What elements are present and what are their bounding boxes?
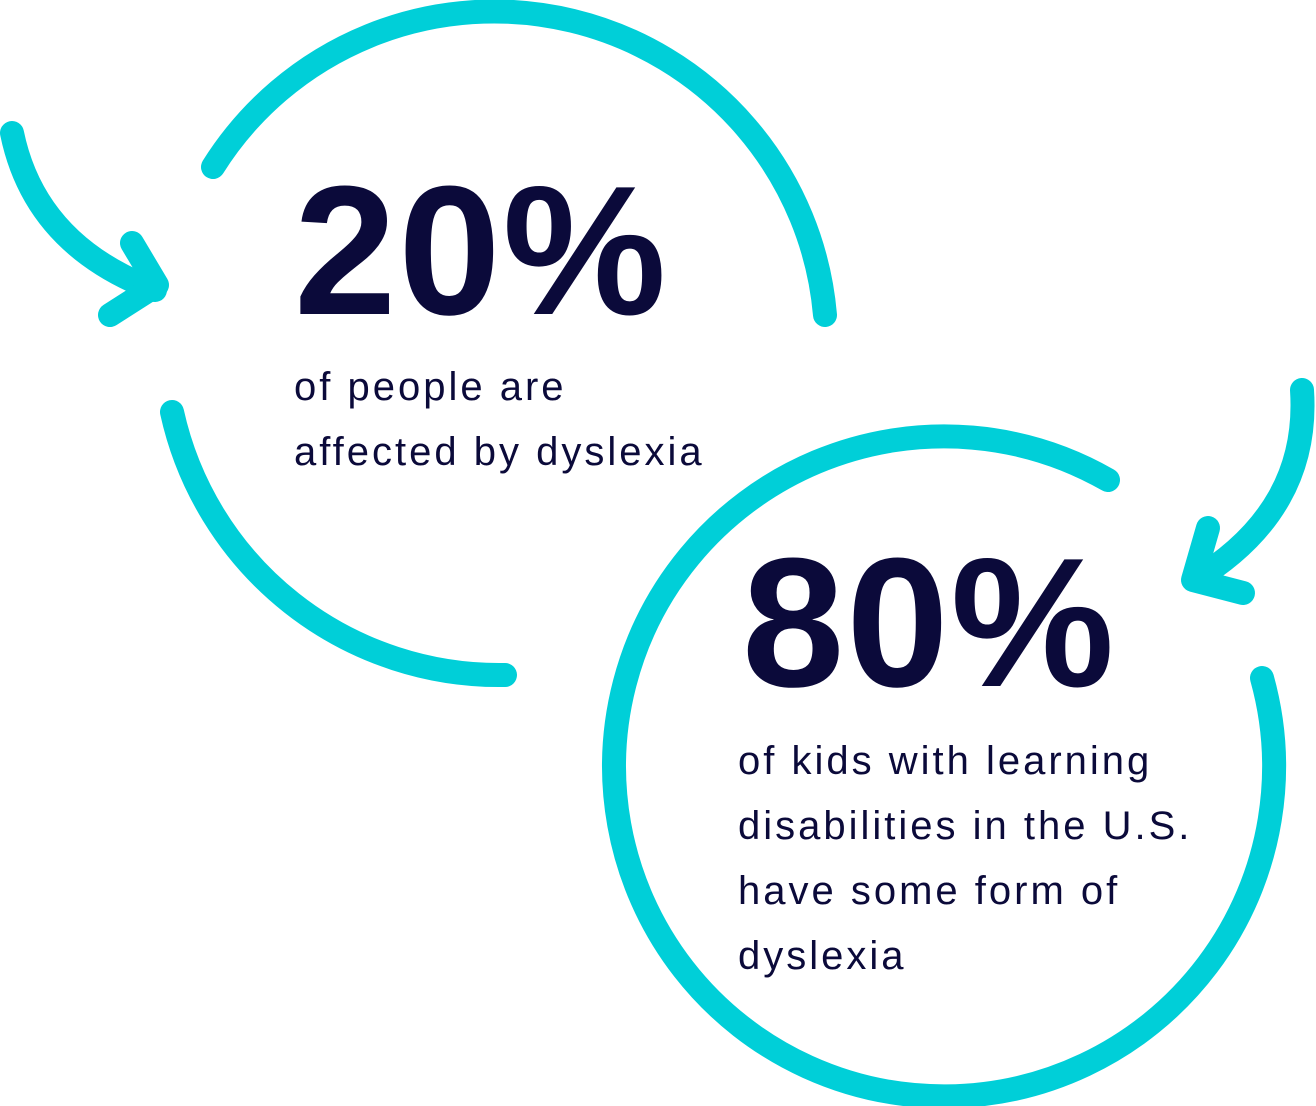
text: 20% description: of people are (294, 365, 567, 409)
text: 80% description: of kids with learning (738, 739, 1152, 783)
text: 80% description (738, 739, 1192, 978)
arrow: right curved arrow (1193, 390, 1303, 593)
arc: bottom of first circle (172, 412, 505, 675)
circle: second stat ring (614, 436, 1274, 1096)
arrow: left curved arrow (12, 133, 157, 315)
stat: 80%: 80% (742, 519, 1116, 725)
stat: 20%: 20% (294, 147, 668, 353)
text: 20% description: affected by dyslexia (294, 430, 705, 474)
text: 20% description (294, 365, 705, 474)
text: 80% description: disabilities in the U.S. (738, 804, 1192, 848)
text: 80% description: dyslexia (738, 934, 907, 978)
arc: top of first circle (213, 11, 825, 315)
text: 80% description: have some form of (738, 869, 1120, 913)
